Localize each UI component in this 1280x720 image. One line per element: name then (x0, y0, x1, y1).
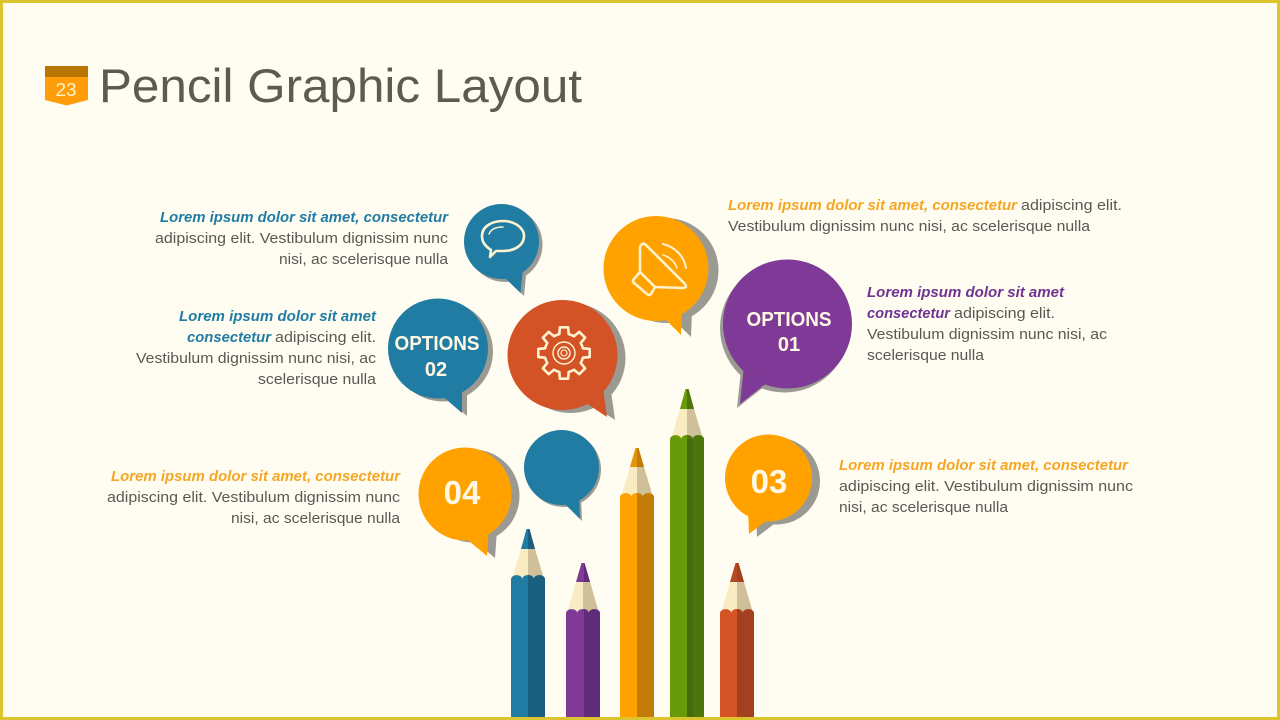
speech bubble: 04 (418, 448, 520, 558)
text block: options 02: consectetur (187, 330, 272, 346)
speech bubble: 03: 03 (751, 463, 787, 500)
text block: 04: Lorem ipsum dolor sit amet, consectetur (111, 469, 401, 485)
speech bubble: options 01 (720, 260, 852, 408)
speech bubble: options 02 (388, 298, 493, 416)
text block: top left: adipiscing elit. Vestibulum dignissim nunc (155, 231, 448, 247)
slide number badge (45, 66, 88, 106)
text block: options 01: adipiscing elit. (954, 306, 1055, 322)
text block: options 02: scelerisque nulla (258, 372, 377, 388)
speech bubble: 04: 04 (444, 474, 481, 511)
pencil: blue (511, 529, 545, 717)
text block: 04: adipiscing elit. Vestibulum dignissim nunc (107, 490, 400, 506)
text block: top right: Vestibulum dignissim nunc nisi, ac scelerisque nulla (728, 219, 1091, 235)
text block: top right: adipiscing elit. (1021, 198, 1122, 214)
text block: options 01: Lorem ipsum dolor sit amet (867, 285, 1065, 301)
text block: top left (155, 210, 449, 268)
text block: options 01: consectetur (867, 306, 951, 322)
pencil: purple (566, 563, 600, 717)
speech bubble: chat icon (464, 204, 542, 296)
text block: options 01: Vestibulum dignissim nunc nisi, ac (867, 327, 1107, 343)
text block: 04 (107, 469, 401, 527)
speech bubble: 03 (725, 434, 820, 537)
speech bubble: gear icon (508, 300, 626, 420)
title: Pencil Graphic Layout (99, 59, 582, 112)
slide number badge: 23 (56, 80, 76, 100)
text block: 03: nisi, ac scelerisque nulla (839, 500, 1009, 516)
text block: top left: nisi, ac scelerisque nulla (279, 252, 449, 268)
pencil: orange (620, 448, 654, 717)
speech bubble: options 01: OPTIONS (746, 309, 832, 331)
icon: chat (482, 221, 524, 257)
text block: options 02 (136, 309, 377, 388)
text block: options 02: Vestibulum dignissim nunc nisi, ac (136, 351, 376, 367)
text block: 03: Lorem ipsum dolor sit amet, consectetur (839, 458, 1129, 474)
text block: top right: Lorem ipsum dolor sit amet, consectetur (728, 198, 1018, 214)
speech bubble: options 02: OPTIONS (394, 333, 480, 355)
icon: speaker (633, 244, 686, 295)
text block: options 01 (867, 285, 1107, 364)
text block: 04: nisi, ac scelerisque nulla (231, 511, 401, 527)
text block: 03: adipiscing elit. Vestibulum dignissim nunc (839, 479, 1133, 495)
speech bubble: options 01: 01 (778, 334, 800, 356)
pencil: red (720, 563, 754, 717)
speech bubble: options 02: 02 (425, 359, 447, 381)
text block: top right (728, 198, 1122, 235)
speech bubble: speaker icon (604, 216, 718, 337)
text block: top left: Lorem ipsum dolor sit amet, consectetur (160, 210, 449, 226)
pencil: green (670, 389, 704, 717)
text block: options 02: Lorem ipsum dolor sit amet (179, 309, 377, 325)
text block: options 01: scelerisque nulla (867, 348, 985, 364)
text block: options 02: adipiscing elit. (275, 330, 376, 346)
speech bubble: empty blue (524, 430, 601, 521)
icon: gear (538, 327, 590, 379)
text block: 03 (839, 458, 1133, 516)
